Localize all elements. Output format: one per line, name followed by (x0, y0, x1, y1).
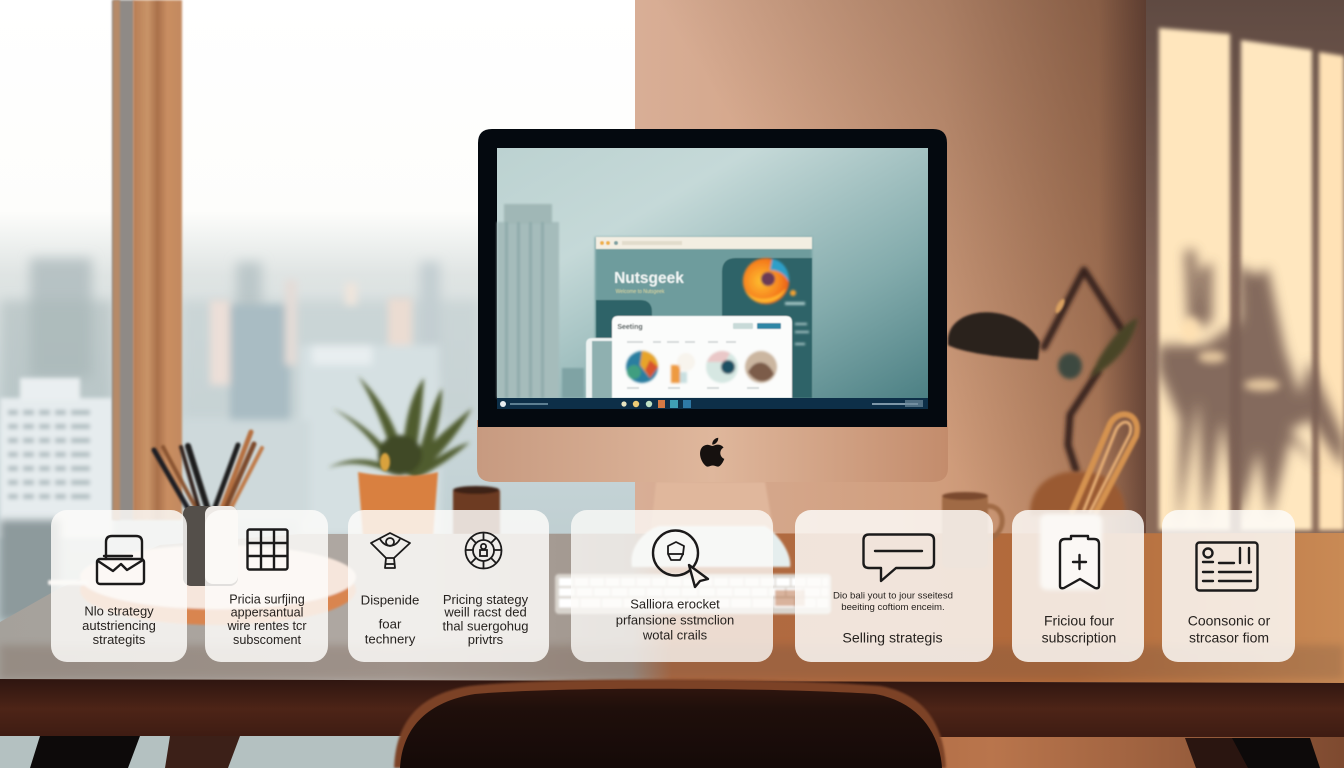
desk lamp (948, 270, 1138, 515)
label: strcasor fiom (1189, 630, 1269, 646)
label left: Dispenide (361, 592, 419, 608)
left dark panel (596, 300, 652, 345)
icon: speech bubble (864, 534, 934, 581)
icon: magnifier with cursor (653, 530, 708, 587)
label: wotal crails (642, 628, 708, 642)
label: subscription (1042, 630, 1116, 646)
icon: form card (1196, 542, 1258, 590)
label: Pricia surfjing (229, 592, 305, 606)
panel background (795, 510, 993, 662)
label: Nlo strategy (84, 604, 154, 618)
lamp shade (948, 312, 1040, 360)
card thumbnails (626, 351, 777, 383)
label: Friciou four (1044, 612, 1114, 628)
near building with windows (0, 378, 113, 538)
label left: foar (379, 616, 402, 632)
label right: privtrs (468, 632, 504, 647)
pencil holder (154, 432, 262, 586)
pot (358, 472, 438, 550)
panel background (571, 510, 773, 662)
keyboard (555, 574, 831, 614)
label: autstriencing (82, 618, 156, 633)
panel 6: subscription (1012, 510, 1144, 662)
white card (612, 316, 792, 398)
panel background (1162, 510, 1295, 662)
taskbar (497, 398, 928, 409)
card heading: Seeting (617, 324, 643, 331)
screen building (497, 204, 584, 398)
background: side wall with sun stripes (1146, 0, 1344, 560)
label: subscoment (233, 633, 301, 647)
right coffee mug (942, 492, 1002, 568)
office chair (394, 679, 946, 768)
black bezel (478, 129, 947, 427)
label: prfansione sstmclion (616, 612, 734, 628)
floor and desk legs (0, 736, 1344, 768)
aluminium chin (477, 420, 948, 482)
browser window (586, 237, 812, 398)
label: strategits (93, 632, 146, 647)
site name: Nutsgeek (614, 270, 684, 287)
background: city window (0, 0, 640, 640)
window frame and curtain (112, 0, 182, 520)
panel 1: strategy (51, 510, 187, 662)
label: Selling strategis (842, 630, 943, 646)
desk surface (0, 533, 1344, 683)
label: Coonsonic or (1188, 612, 1271, 628)
left white sliver (586, 338, 614, 398)
plant shadow (1158, 250, 1344, 530)
icon: balloon eye (371, 533, 410, 568)
label right: Pricing stategy (443, 592, 529, 607)
label right: weill racst ded (443, 604, 527, 620)
panel 7: form (1162, 510, 1295, 662)
iMac stand (631, 482, 790, 567)
label: wire rentes tcr (226, 619, 307, 633)
glass jar with copper loop (1040, 414, 1137, 590)
icon: grid (248, 530, 288, 570)
background: wall (635, 0, 1150, 560)
label: Salliora erocket (630, 596, 720, 612)
label right: thal suergohug (442, 618, 529, 634)
panel background (205, 510, 328, 662)
subtitle: Welcome to Nutsgeek (616, 289, 665, 295)
panel 5: speech (795, 510, 993, 662)
white round tray (48, 545, 356, 625)
icon: ticket (1060, 536, 1099, 588)
small description: beeiting coftiom enceim. (841, 602, 945, 613)
right dark panel (722, 258, 812, 398)
iMac monitor (477, 129, 948, 482)
panel background (348, 510, 549, 662)
small description: Dio bali yout to jour sseitesd (833, 590, 953, 602)
icon: browser logo (743, 258, 796, 304)
icon: lock badge (466, 532, 502, 568)
label left: technery (365, 632, 416, 646)
icon: envelope (97, 536, 144, 584)
dark mug (453, 486, 500, 548)
plant with orange pot (328, 376, 472, 550)
panel 2: pricing grid (205, 510, 328, 662)
desk front edge (0, 679, 1344, 739)
screen wallpaper (497, 148, 928, 398)
panel background (51, 510, 187, 662)
icon: apple logo (700, 438, 724, 467)
label: appersantual (231, 606, 303, 620)
panel background (1012, 510, 1144, 662)
panel 4: search (571, 510, 773, 662)
panel 3: dual column (348, 510, 549, 662)
